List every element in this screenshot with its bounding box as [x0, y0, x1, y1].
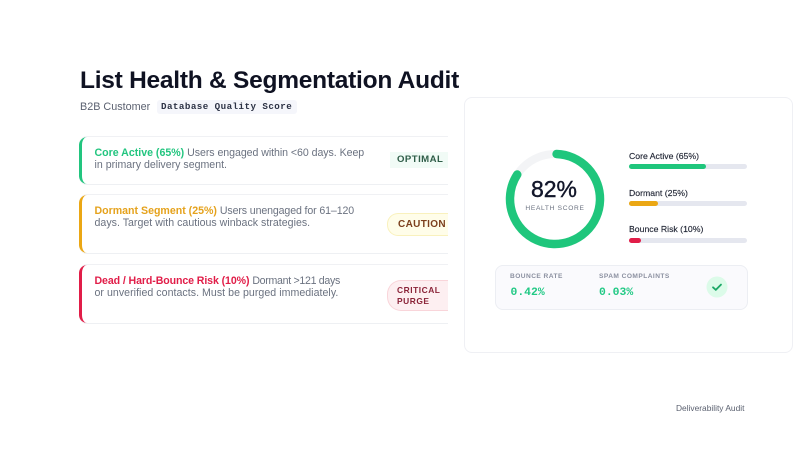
text: dormant description: days. Target with cautious winback strategies.	[94, 217, 310, 229]
text: dormant description	[94, 205, 354, 229]
badge: critical purge: PURGE	[397, 296, 430, 306]
text: dormant description: Dormant Segment (25%) Users unengaged for 61–120	[94, 205, 354, 217]
badge: caution: CAUTION	[398, 219, 446, 230]
panel: core active segment	[79, 136, 448, 185]
bar: core active	[629, 164, 747, 169]
badge: critical purge	[387, 280, 448, 311]
panel: deliverability metrics	[495, 265, 748, 310]
title: List Health & Segmentation Audit	[80, 67, 459, 94]
text: dead or hard-bounce description: Dead / Hard-Bounce Risk (10%) Dormant >121 days	[94, 275, 340, 287]
panel: health dashboard	[464, 97, 793, 353]
text: core active description: Core Active (65%) Users engaged within <60 days. Keep	[94, 147, 364, 159]
metric value: spam complaints: 0.03%	[599, 287, 633, 299]
ring value: 82%	[531, 176, 577, 202]
label: bounce risk bar: Bounce Risk (10%)	[629, 224, 703, 234]
text: dead or hard-bounce description	[94, 275, 340, 299]
ring label: HEALTH SCORE	[525, 205, 585, 212]
metric value: bounce rate: 0.42%	[510, 287, 545, 299]
bar: dormant	[629, 201, 747, 206]
bar: bounce risk	[629, 238, 747, 243]
accent bar: red	[79, 265, 91, 323]
badge: optimal: OPTIMAL	[397, 154, 443, 165]
metric label: bounce rate: BOUNCE RATE	[510, 273, 563, 280]
badge: critical purge: CRITICAL	[397, 285, 440, 295]
text: dead or hard-bounce description: or unverified contacts. Must be purged immediately.	[94, 287, 338, 299]
subtitle tag: database quality score: Database Quality Score	[161, 101, 292, 112]
metric label: spam complaints: SPAM COMPLAINTS	[599, 273, 670, 280]
accent bar: amber	[79, 195, 91, 253]
text: core active description	[94, 147, 364, 171]
badge: optimal	[390, 152, 448, 168]
subtitle: audience: B2B Customer	[80, 101, 150, 113]
chart: health score ring	[506, 150, 604, 248]
label: core active bar: Core Active (65%)	[629, 151, 699, 161]
panel: dead or hard-bounce risk segment	[79, 264, 448, 324]
label: dormant bar: Dormant (25%)	[629, 188, 688, 198]
accent bar: green	[79, 137, 91, 184]
badge: caution	[387, 213, 448, 236]
footer label: Deliverability Audit	[676, 403, 744, 413]
text: core active description: in primary delivery segment.	[94, 159, 227, 171]
icon: check mark	[706, 276, 728, 298]
panel: dormant segment	[79, 194, 448, 254]
